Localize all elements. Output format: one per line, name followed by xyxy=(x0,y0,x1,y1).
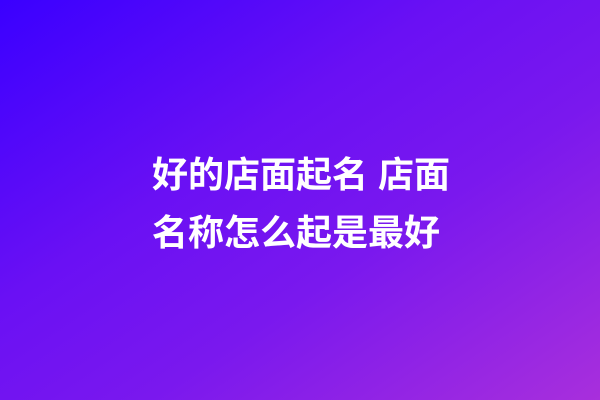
title line 2: 名称怎么起是最好 xyxy=(152,212,440,253)
title line 1: 好的店面起名 店面 xyxy=(152,154,450,195)
title xyxy=(152,154,450,253)
